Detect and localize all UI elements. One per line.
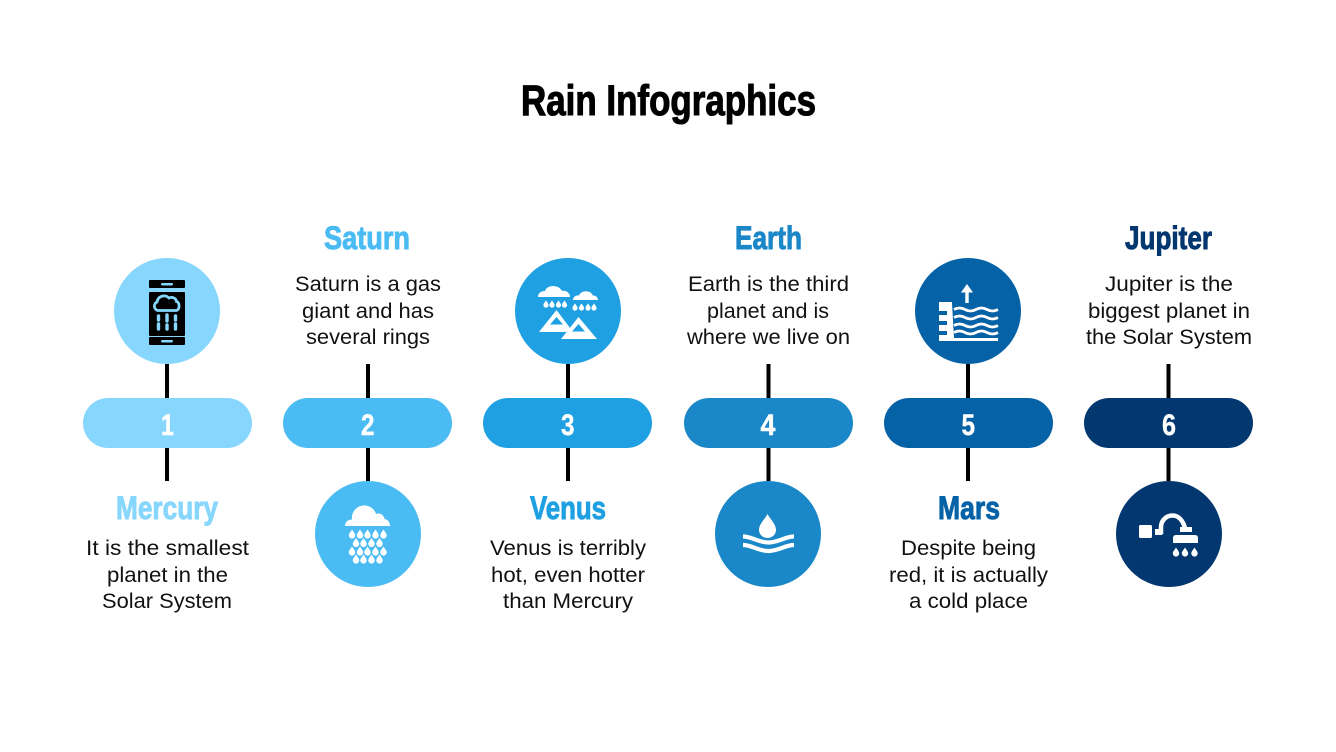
column 1: Mercury [83,258,252,613]
description: Earth: Earth is the third [688,273,849,296]
description: Earth [686,273,850,349]
description: Jupiter: the Solar System [1086,326,1252,349]
column 6: Jupiter [1084,220,1253,587]
number pill 3 [483,398,652,448]
description: Earth: planet and is [707,300,829,323]
description: Saturn [295,273,441,349]
heading: Earth: Earth [735,220,802,256]
icon: dam with rising water [915,258,1021,364]
icon: phone with rain cloud [114,258,220,364]
heading: Saturn: Saturn [324,220,410,256]
connector lines [366,364,370,481]
icon: rain cloud [315,481,421,587]
column 4: Earth [684,220,853,587]
number pill 6: 6 [1162,409,1176,442]
description: Saturn: giant and has [302,300,434,323]
description: Mars: red, it is actually [889,564,1049,587]
description: Mars: a cold place [909,590,1028,613]
heading: Mars: Mars [938,490,1000,526]
icon: shower tap [1116,481,1222,587]
number pill 1: 1 [161,409,174,442]
description: Mars [889,537,1049,613]
heading: Jupiter: Jupiter [1125,220,1212,256]
description: Venus [490,537,647,613]
heading: Venus: Venus [530,490,606,526]
heading: Mercury: Mercury [116,490,218,526]
number pill 5 [884,398,1053,448]
number pill 6 [1084,398,1253,448]
number pill 2: 2 [361,409,374,442]
number pill 5: 5 [962,409,975,442]
connector lines [566,364,570,481]
description: Venus: Venus is terribly [490,537,647,560]
connector lines [966,364,970,481]
description: Mercury: It is the smallest [86,537,249,560]
description: Mars: Despite being [901,537,1036,560]
number pill 2 [283,398,452,448]
description: Mercury: Solar System [102,590,232,613]
description: Saturn: several rings [306,326,430,349]
description: Saturn: Saturn is a gas [295,273,441,296]
connector lines [766,364,770,481]
number pill 3: 3 [561,409,574,442]
description: Jupiter: Jupiter is the [1105,273,1233,296]
description: Mercury [86,537,249,613]
description: Jupiter [1086,273,1252,349]
number pill 4 [684,398,853,448]
number pill 4: 4 [760,409,776,442]
description: Mercury: planet in the [107,564,228,587]
description: Venus: hot, even hotter [491,564,645,587]
connector lines [1166,364,1170,481]
column 3: Venus [483,258,652,613]
description: Jupiter: biggest planet in [1088,300,1250,323]
number pill 1 [83,398,252,448]
column 5: Mars [884,258,1053,613]
connector lines [165,364,169,481]
column 2: Saturn [283,220,452,587]
icon: water drop and waves [715,481,821,587]
title: Rain Infographics [521,78,816,125]
icon: clouds and mountains [515,258,621,364]
description: Earth: where we live on [686,326,850,349]
description: Venus: than Mercury [503,590,634,613]
